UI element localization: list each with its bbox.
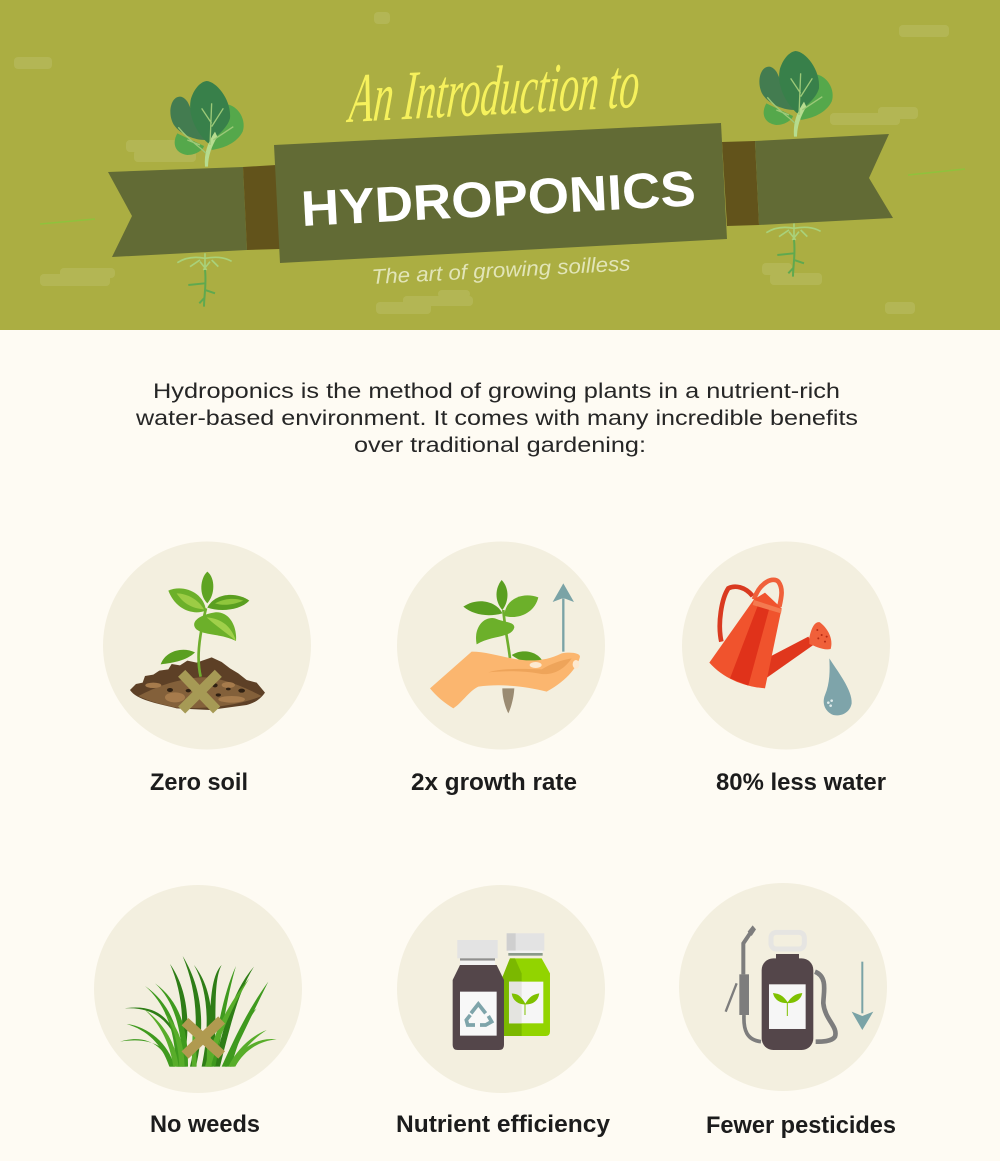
panel: no weeds (94, 885, 302, 1138)
icon: seedling in soil with cross (130, 572, 265, 710)
banner ribbon (108, 123, 893, 263)
icon: nutrient bottles (453, 933, 550, 1050)
intro paragraph: water-based environment. It comes with many incredible benefits (135, 407, 858, 430)
label: Zero soil (150, 769, 248, 796)
title: hydroponics: HYDROPONICS (300, 160, 697, 237)
panel: nutrient efficiency (396, 885, 611, 1138)
icon: grass with cross (120, 956, 277, 1067)
icon: watering can and drop (709, 580, 852, 715)
label: 2x growth rate (411, 769, 577, 796)
label: 80% less water (716, 769, 886, 796)
label: Nutrient efficiency (396, 1111, 611, 1138)
icon: left roots (177, 253, 232, 307)
panel: header (0, 0, 1000, 330)
icon: left spinach leaves (170, 81, 244, 167)
icon: hand holding seedling with up arrow (430, 580, 580, 713)
subtitle: The art of growing soilless (371, 252, 631, 289)
icon: right roots (766, 223, 821, 277)
icon: sprayer with down arrow (726, 925, 873, 1050)
panel: growth rate (397, 542, 605, 796)
title script: An Introduction to (344, 45, 643, 138)
panel: less water (682, 542, 890, 796)
label: Fewer pesticides (706, 1112, 896, 1139)
panel: zero soil (103, 542, 311, 796)
icon: right spinach leaves (759, 51, 833, 137)
intro paragraph: Hydroponics is the method of growing plants in a nutrient-rich (153, 380, 840, 403)
intro paragraph (135, 380, 858, 457)
panel: fewer pesticides (679, 883, 896, 1139)
label: No weeds (150, 1111, 260, 1138)
intro paragraph: over traditional gardening: (354, 434, 646, 457)
